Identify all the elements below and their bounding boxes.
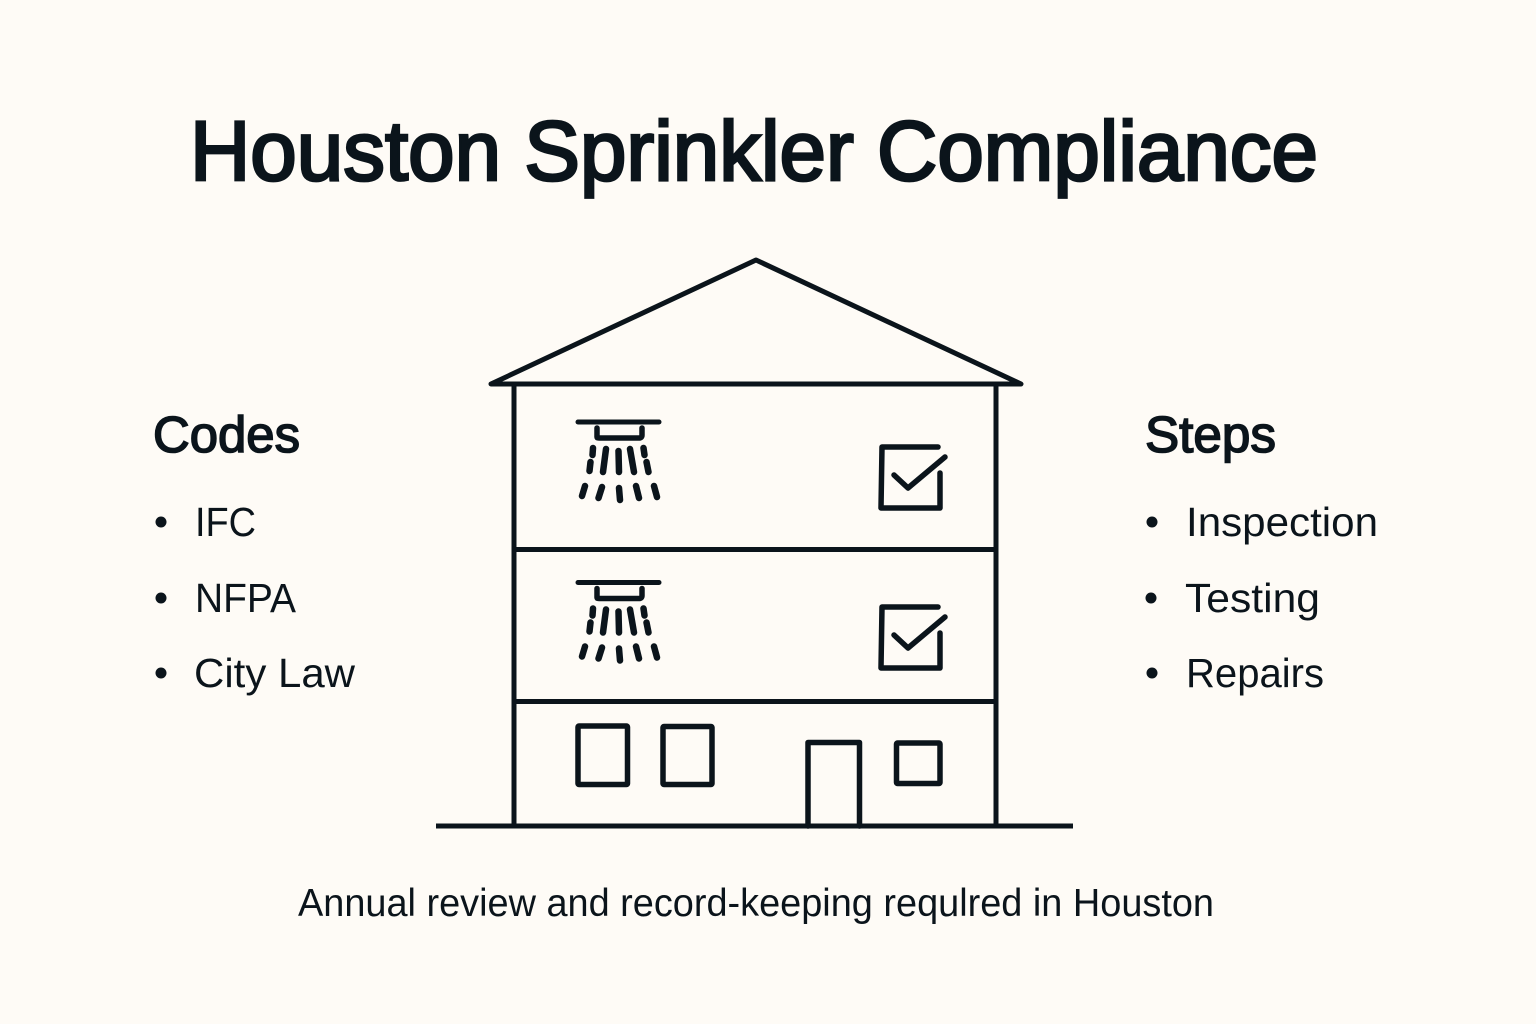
window: ground floor left	[578, 726, 628, 784]
icon: sprinkler, upper floor	[578, 422, 659, 500]
list item: NFPA	[156, 575, 297, 621]
list item: NFPA: NFPA	[195, 575, 297, 621]
icon: checkbox, upper floor	[881, 447, 945, 508]
list item: repairs: Repairs	[1186, 650, 1324, 696]
heading: codes: Codes	[153, 406, 300, 463]
window: ground floor centre	[663, 726, 712, 784]
panel: codes	[153, 406, 355, 696]
heading: steps: Steps	[1145, 406, 1276, 463]
title: Houston Sprinkler Compliance	[190, 104, 1318, 198]
icon: sprinkler, middle floor	[578, 582, 659, 660]
list item: IFC: IFC	[195, 499, 256, 545]
list item: testing: Testing	[1185, 575, 1320, 621]
list item: IFC	[156, 499, 256, 545]
panel: steps	[1145, 406, 1378, 696]
walls and floors	[514, 384, 996, 826]
building illustration	[436, 260, 1073, 826]
icon: checkbox, middle floor	[881, 607, 945, 668]
list item: City Law: City Law	[194, 650, 355, 696]
list item: inspection: Inspection	[1186, 499, 1378, 545]
window: ground floor right	[896, 743, 940, 784]
roof	[491, 260, 1021, 384]
footer note: Annual review and record-keeping requlred in Houston	[298, 882, 1214, 925]
ground line	[436, 824, 1073, 828]
door	[808, 742, 860, 826]
